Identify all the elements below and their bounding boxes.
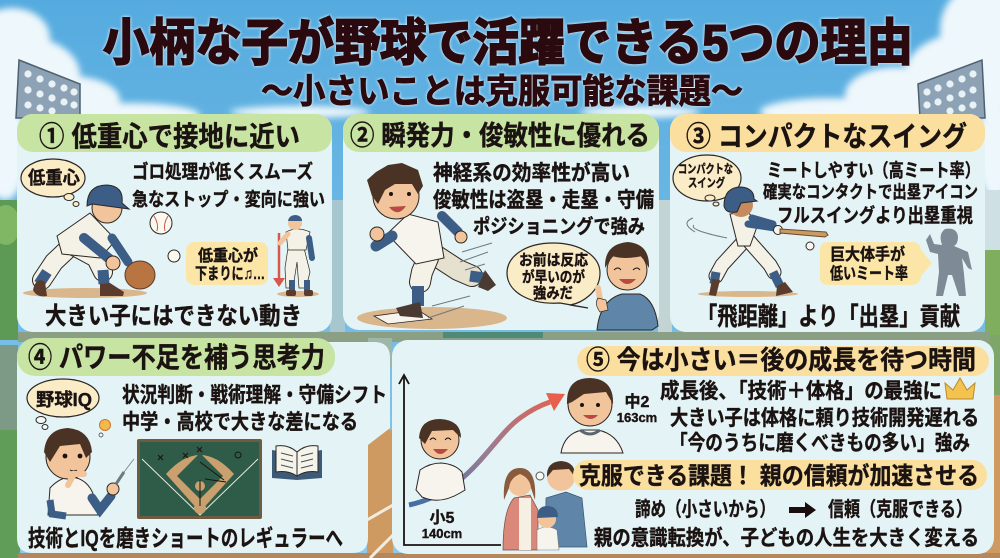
speech bubble: coach: お前は反応 (519, 251, 588, 269)
thought bubble: compact swing: スイング (688, 175, 725, 190)
illustration: coach (596, 242, 658, 330)
panel 5: small now, growth later (392, 340, 994, 554)
thought bubble: baseball IQ: 野球IQ (36, 390, 92, 410)
floodlight: left (16, 60, 80, 118)
panel 3 heading: ③ コンパクトなスイング (686, 120, 967, 152)
text block: panel 2 points (433, 161, 654, 238)
panel 5 heading: ⑤ 今は小さい＝後の成長を待つ時間 (586, 345, 976, 375)
title: 小柄な子が野球で活躍できる5つの理由 (103, 15, 913, 71)
panel 1 heading: ① 低重心で接地に近い (39, 121, 300, 152)
text: resignation: 諦め（小さいから） (635, 498, 775, 521)
panel 2: explosive power and agility (343, 114, 659, 330)
text block: panel 2 points: 神経系の効率性が高い (433, 161, 630, 185)
icon: big player silhouette (926, 229, 972, 296)
callout: big hitter: 巨大体手が (830, 244, 905, 264)
thought bubble: low centre (21, 159, 85, 206)
bottom message: panel 1: 大きい子にはできない動き (45, 303, 302, 330)
illustration: batter (687, 187, 828, 297)
text block: panel 4 points (122, 383, 387, 434)
panel 4: thinking compensates for power (17, 338, 390, 553)
illustration: family (503, 461, 587, 550)
speech bubble: coach (507, 243, 600, 308)
illustration: thinking boy (44, 428, 134, 516)
label: grade 5 height (422, 509, 462, 541)
text block: panel 1 points: ゴロ処理が低くスムーズ (132, 160, 313, 183)
text block: panel 2 points: ポジショニングで強み (473, 215, 645, 238)
text block: panel 3 points (763, 160, 980, 227)
thought bubble: low centre: 低重心 (28, 168, 80, 188)
illustration: running boy (357, 163, 507, 329)
label: grade 5 height: 小5 (430, 509, 455, 527)
panel 2 heading: ② 瞬発力・俊敏性に優れる (350, 121, 650, 151)
text block: panel 5 points: 成長後、「技術＋体格」の最強に (660, 379, 942, 403)
callout: low centre (186, 242, 268, 285)
illustration: small boy grade 5 (416, 419, 465, 500)
floodlight: right (918, 60, 985, 118)
icon: crown (945, 378, 975, 399)
text block: panel 1 points (132, 160, 325, 210)
speech bubble: coach: が早いのが (522, 268, 585, 286)
subtitle: ～小さいことは克服可能な課題～ (261, 73, 743, 111)
arrow: downward red (273, 233, 285, 287)
chalkboard: field diagram (137, 439, 262, 519)
illustration: older boy grade 8 (561, 378, 623, 453)
growth chart: axes and curve (399, 375, 565, 545)
label: grade 8 height: 163cm (617, 410, 657, 425)
text block: panel 2 points: 俊敏性は盗塁・走塁・守備 (433, 189, 654, 212)
callout: big hitter (820, 242, 932, 285)
panel 4 heading: ④ パワー不足を補う思考力 (28, 342, 325, 373)
text block: panel 4 points: 中学・高校で大きな差になる (122, 411, 358, 434)
icon: open book (272, 446, 322, 480)
thought bubble: compact swing: コンパクトな (678, 162, 733, 176)
bottom message: panel 4: 技術とIQを磨きショートのレギュラーへ (28, 525, 343, 551)
callout: low centre: 下まりに♫… (195, 265, 265, 283)
label: grade 8 height: 中2 (625, 393, 650, 411)
speech bubble: coach: 強みだ (533, 285, 573, 302)
illustration: standing player (277, 215, 319, 297)
text block: panel 4 points: 状況判断・戦術理解・守備シフト (122, 383, 387, 407)
thought bubble: baseball IQ (27, 379, 99, 430)
arrow: resignation to trust (789, 502, 816, 518)
text block: panel 5 points (660, 379, 979, 455)
callout: big hitter: 低いミート率 (830, 264, 908, 283)
text block: panel 1 points: 急なストップ・変向に強い (132, 189, 325, 210)
callout: low centre: 低重心が (198, 246, 258, 265)
icon: light bulb (99, 420, 110, 437)
panel 1: low centre of gravity (17, 114, 332, 332)
thought bubble: compact swing (673, 155, 741, 206)
label: grade 5 height: 140cm (422, 526, 462, 541)
illustration: crouching fielder (23, 185, 180, 298)
label: grade 8 height (617, 393, 657, 425)
panel 3: compact swing (670, 114, 985, 332)
